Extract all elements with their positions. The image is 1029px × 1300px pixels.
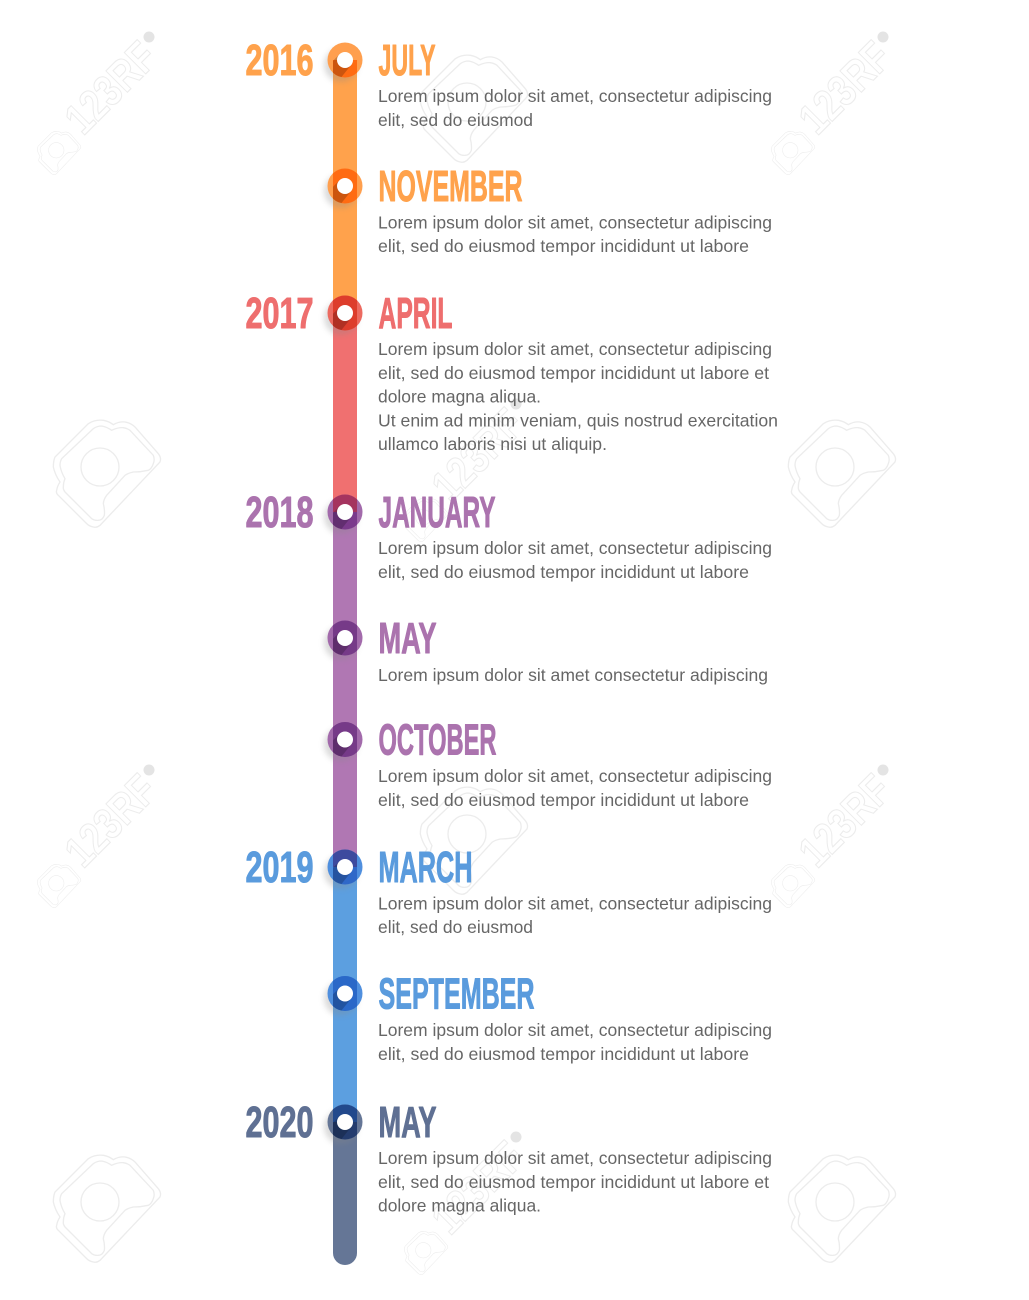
marker: [322, 849, 362, 892]
entry: 2016 July: [246, 36, 772, 130]
year: 2018: [246, 488, 314, 537]
description: elit, sed do eiusmod tempor incididunt ut labore et: [378, 363, 769, 383]
entry: 2018 January: [246, 488, 772, 582]
marker: [322, 620, 362, 663]
description: elit, sed do eiusmod: [378, 110, 533, 130]
month: OCTOBER: [378, 716, 496, 764]
entry: November: [322, 162, 772, 256]
marker: [322, 1104, 362, 1147]
description: Lorem ipsum dolor sit amet, consectetur adipiscing: [378, 86, 772, 106]
description: elit, sed do eiusmod tempor incididunt ut labore: [378, 562, 749, 582]
watermark: 123RF logos: 123RF: [423, 1133, 534, 1244]
entry: May 2018: [322, 614, 768, 685]
entry: 2020 May: [246, 1098, 772, 1216]
description: [378, 1020, 772, 1064]
timeline infographic: [37, 32, 896, 1275]
month: MARCH: [378, 843, 472, 892]
description: [378, 212, 772, 256]
description: elit, sed do eiusmod tempor incididunt ut labore: [378, 790, 749, 810]
marker: [322, 42, 362, 85]
year: 2019: [246, 843, 314, 892]
month: MAY: [378, 1098, 436, 1147]
month: NOVEMBER: [378, 162, 522, 211]
description: dolore magna aliqua.: [378, 1196, 541, 1216]
description: Lorem ipsum dolor sit amet, consectetur adipiscing: [378, 339, 772, 359]
entry: 2017 April: [246, 289, 778, 454]
entry: October: [322, 716, 772, 810]
description: [378, 1148, 772, 1216]
description: Lorem ipsum dolor sit amet, consectetur adipiscing: [378, 212, 772, 232]
marker: [322, 722, 362, 764]
description: Lorem ipsum dolor sit amet consectetur adipiscing: [378, 665, 768, 685]
description: Lorem ipsum dolor sit amet, consectetur adipiscing: [378, 766, 772, 786]
watermark: 123RF logos: 123RF: [423, 400, 534, 511]
year: 2017: [246, 289, 314, 338]
marker: [322, 976, 362, 1018]
description: dolore magna aliqua.: [378, 386, 541, 406]
marker: [322, 168, 362, 211]
description: [378, 894, 772, 937]
description: Lorem ipsum dolor sit amet, consectetur adipiscing: [378, 538, 772, 558]
year: 2016: [246, 36, 314, 85]
description: ullamco laboris nisi ut aliquip.: [378, 434, 607, 454]
watermark: 123RF logos: 123RF: [790, 33, 901, 144]
description: elit, sed do eiusmod: [378, 917, 533, 937]
description: Lorem ipsum dolor sit amet, consectetur adipiscing: [378, 1148, 772, 1168]
entry: September: [322, 970, 772, 1064]
timeline bar: [333, 60, 357, 1265]
watermark: 123RF logos: 123RF: [56, 33, 167, 144]
description: [378, 339, 778, 454]
description: Ut enim ad minim veniam, quis nostrud exercitation: [378, 410, 778, 430]
month: JANUARY: [378, 488, 496, 537]
description: Lorem ipsum dolor sit amet, consectetur adipiscing: [378, 1020, 772, 1040]
watermark: 123RF logos: 123RF: [790, 766, 901, 877]
entry: 2019 March: [246, 843, 772, 937]
marker: [322, 494, 362, 537]
month: APRIL: [378, 289, 452, 338]
watermark: 123RF logos: 123RF: [56, 766, 167, 877]
month: JULY: [378, 36, 436, 85]
description: [378, 538, 772, 582]
month: MAY: [378, 614, 436, 663]
description: Lorem ipsum dolor sit amet, consectetur adipiscing: [378, 894, 772, 914]
description: elit, sed do eiusmod tempor incididunt ut labore et: [378, 1172, 769, 1192]
description: elit, sed do eiusmod tempor incididunt ut labore: [378, 236, 749, 256]
month: SEPTEMBER: [378, 970, 534, 1018]
description: [378, 766, 772, 810]
marker: [322, 295, 362, 338]
year: 2020: [246, 1098, 314, 1147]
description: elit, sed do eiusmod tempor incididunt ut labore: [378, 1044, 749, 1064]
description: [378, 86, 772, 130]
watermark: egg icons: [53, 55, 896, 1262]
